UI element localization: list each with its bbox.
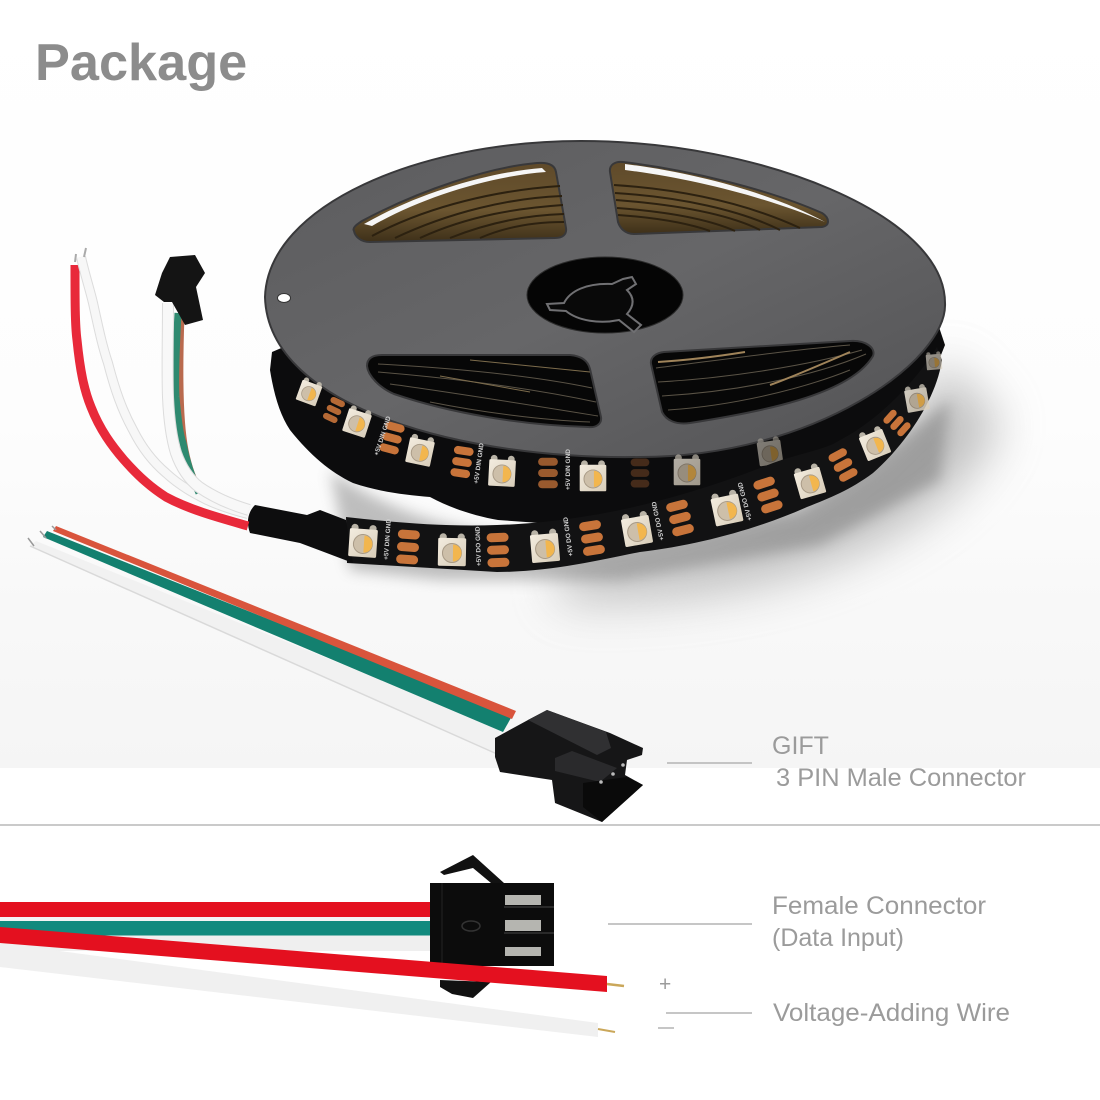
heat shrink sleeve xyxy=(248,505,353,563)
front LED strip: +5V DO GND xyxy=(651,501,666,541)
white data wire xyxy=(168,303,249,510)
reel shadow xyxy=(330,360,1000,601)
reel strip LEDs: +5V DIN GND xyxy=(565,449,572,490)
plus sign: + xyxy=(659,973,671,996)
minus sign xyxy=(658,1027,674,1029)
front LED strip: +5V DO GND xyxy=(475,526,483,566)
front LED strip: +5V DO GND xyxy=(563,516,575,557)
green and brown data wires xyxy=(181,315,201,490)
center hub hole xyxy=(527,257,683,333)
voltage leader line xyxy=(666,1012,752,1014)
flat red wire xyxy=(0,902,432,917)
window: top left xyxy=(353,163,566,242)
front LED strip: +5V DO GND xyxy=(737,481,754,521)
strip lead wires with connector xyxy=(75,248,249,526)
male 3-pin connector xyxy=(495,710,643,822)
gift male connector wires xyxy=(28,526,516,754)
lower reel flange xyxy=(270,300,945,530)
window: top right xyxy=(610,162,828,234)
gift leader line xyxy=(667,762,752,764)
data input label: (Data Input) xyxy=(772,924,904,952)
window: bottom left xyxy=(367,355,601,427)
white wire xyxy=(81,257,248,514)
flat green wire xyxy=(0,921,432,936)
reel strip LEDs: +5V DIN GND xyxy=(473,442,486,484)
window: bottom right xyxy=(651,341,874,423)
front LED strip xyxy=(248,347,942,572)
title: Package xyxy=(35,34,247,92)
section divider xyxy=(0,824,1100,826)
voltage wire label: Voltage-Adding Wire xyxy=(773,999,1010,1027)
panel: LED strip reel xyxy=(265,141,945,530)
gift label: GIFT xyxy=(772,732,829,760)
small connector xyxy=(155,255,205,325)
white voltage wire xyxy=(0,943,598,1037)
flat white wire xyxy=(0,935,432,951)
strip body xyxy=(346,347,942,572)
orange wire xyxy=(53,526,516,719)
male connector label: 3 PIN Male Connector xyxy=(776,764,1026,792)
connector clips xyxy=(440,855,504,883)
mounting notch xyxy=(278,294,290,302)
female connector label: Female Connector xyxy=(772,892,986,920)
reel strip LEDs: +5V DIN GND xyxy=(373,415,393,457)
female connector assembly xyxy=(0,855,624,1037)
upper reel disc xyxy=(265,141,945,457)
female connector leader line xyxy=(608,923,752,925)
red voltage wire xyxy=(0,927,607,992)
connector body xyxy=(430,883,554,966)
reel strip LEDs xyxy=(296,376,783,491)
photo background xyxy=(0,0,1100,768)
white wire xyxy=(30,541,500,754)
front LED strip: +5V DIN GND xyxy=(383,518,393,560)
red wire xyxy=(75,265,248,526)
green wire xyxy=(43,531,512,732)
